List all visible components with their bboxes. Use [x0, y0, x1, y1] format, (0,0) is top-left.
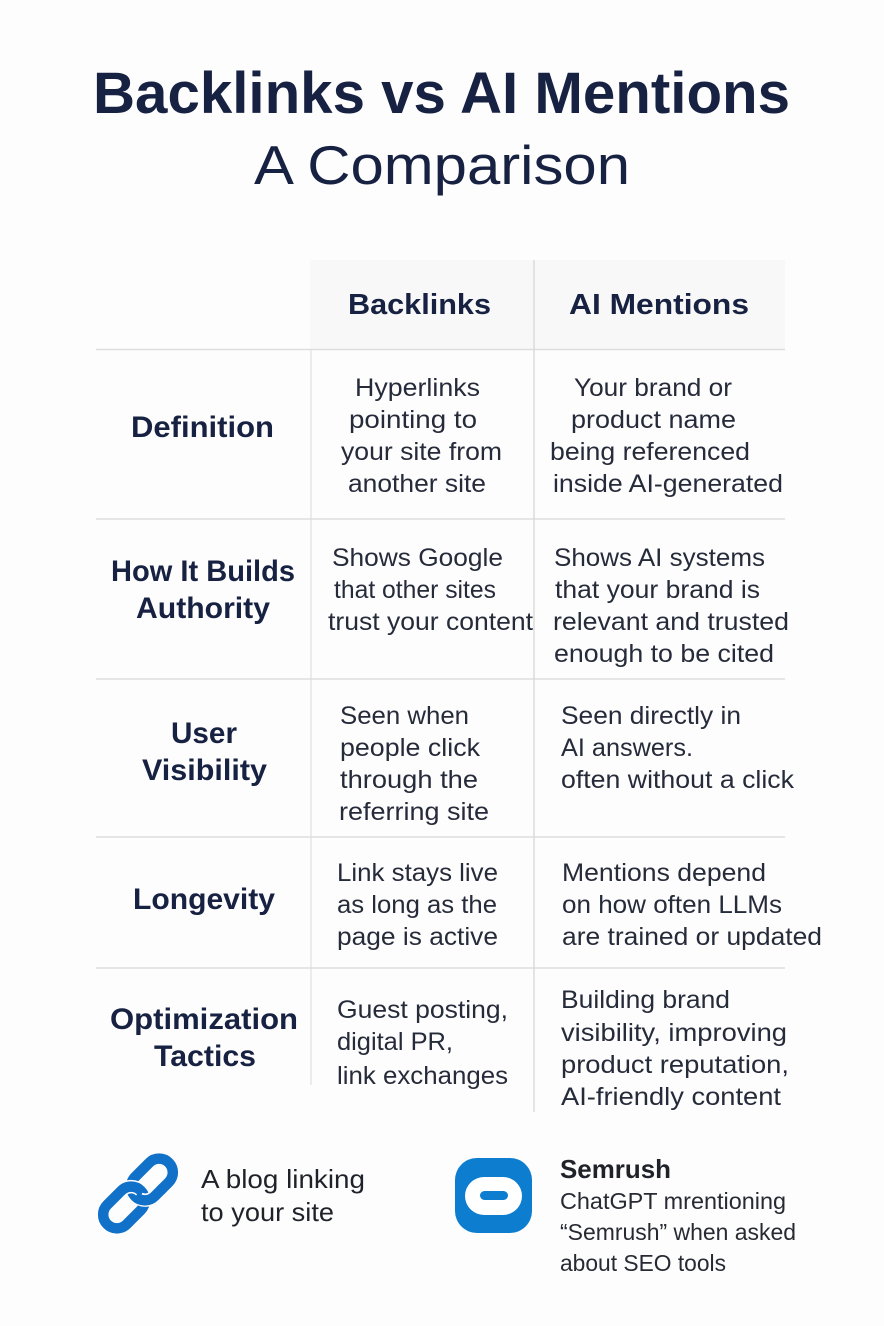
title: A Comparison [254, 134, 630, 196]
row: How It Builds Authority: relevant and trusted [553, 608, 789, 636]
row: How It Builds Authority: How It Builds [111, 555, 295, 588]
row: Optimization Tactics: AI-friendly content [561, 1083, 781, 1111]
row: User Visibility: referring site [339, 798, 489, 826]
row: Longevity: on how often LLMs [562, 891, 782, 919]
row: Optimization Tactics: Building brand [561, 986, 730, 1014]
row: Longevity: Mentions depend [562, 859, 766, 887]
row: Definition: product name [571, 406, 736, 434]
row: User Visibility: often without a click [561, 766, 795, 794]
AI mention example text: “Semrush” when asked [560, 1219, 796, 1245]
row: Optimization Tactics: digital PR, [337, 1028, 453, 1056]
row: Longevity: Longevity [133, 883, 275, 916]
row: Optimization Tactics: visibility, improving [561, 1019, 787, 1047]
row: How It Builds Authority: Authority [136, 592, 270, 625]
row: Longevity [133, 859, 822, 951]
row: User Visibility: through the [340, 766, 478, 794]
AI mention example text: ChatGPT mrentioning [560, 1188, 786, 1214]
AI mention example text: Semrush [560, 1154, 671, 1184]
title: Backlinks vs AI Mentions [93, 61, 790, 126]
row: How It Builds Authority: that other sites [334, 576, 496, 604]
row: Longevity: are trained or updated [562, 923, 822, 951]
row: User Visibility: people click [340, 734, 481, 762]
column header: AI Mentions: AI Mentions [569, 289, 749, 321]
row: Definition: pointing to [349, 406, 477, 434]
row: Optimization Tactics: Guest posting, [337, 996, 508, 1024]
row: Definition: inside AI-generated [553, 470, 783, 498]
row: User Visibility: AI answers. [561, 734, 693, 762]
row: How It Builds Authority: enough to be cited [554, 640, 774, 668]
row: Definition: your site from [341, 438, 502, 466]
row: Optimization Tactics: Optimization [110, 1003, 298, 1036]
row: Optimization Tactics: product reputation, [561, 1051, 789, 1079]
row: Definition: being referenced [550, 438, 750, 466]
row: Longevity: Link stays live [337, 859, 498, 887]
row: User Visibility: Seen directly in [561, 702, 741, 730]
row: Optimization Tactics: link exchanges [337, 1062, 508, 1090]
backlink example text [201, 1164, 365, 1227]
row: User Visibility: Visibility [142, 754, 267, 787]
AI mention example text [560, 1154, 796, 1276]
backlink example text: A blog linking [201, 1164, 365, 1194]
row: Definition: Definition [131, 411, 274, 444]
row: How It Builds Authority [111, 544, 789, 668]
row: Optimization Tactics: Tactics [154, 1040, 256, 1073]
AI mention example text: about SEO tools [560, 1250, 726, 1276]
row: Longevity: page is active [337, 923, 498, 951]
row: Definition [131, 374, 783, 498]
row: User Visibility [142, 702, 795, 826]
row: Definition: Hyperlinks [355, 374, 480, 402]
column header: Backlinks: Backlinks [348, 289, 491, 321]
row: User Visibility: Seen when [340, 702, 469, 730]
row: Optimization Tactics [110, 986, 789, 1111]
row: How It Builds Authority: trust your content [328, 608, 533, 636]
row: How It Builds Authority: Shows Google [332, 544, 503, 572]
row: Definition: Your brand or [574, 374, 732, 402]
icon: chain link [97, 1153, 179, 1234]
backlink example text: to your site [201, 1197, 334, 1227]
row: How It Builds Authority: Shows AI systems [554, 544, 765, 572]
row: Longevity: as long as the [337, 891, 497, 919]
row: User Visibility: User [171, 717, 237, 750]
title [93, 61, 790, 196]
comparison table [96, 260, 822, 1112]
row: How It Builds Authority: that your brand is [555, 576, 760, 604]
row: Definition: another site [348, 470, 486, 498]
icon: Semrush app [455, 1158, 532, 1233]
